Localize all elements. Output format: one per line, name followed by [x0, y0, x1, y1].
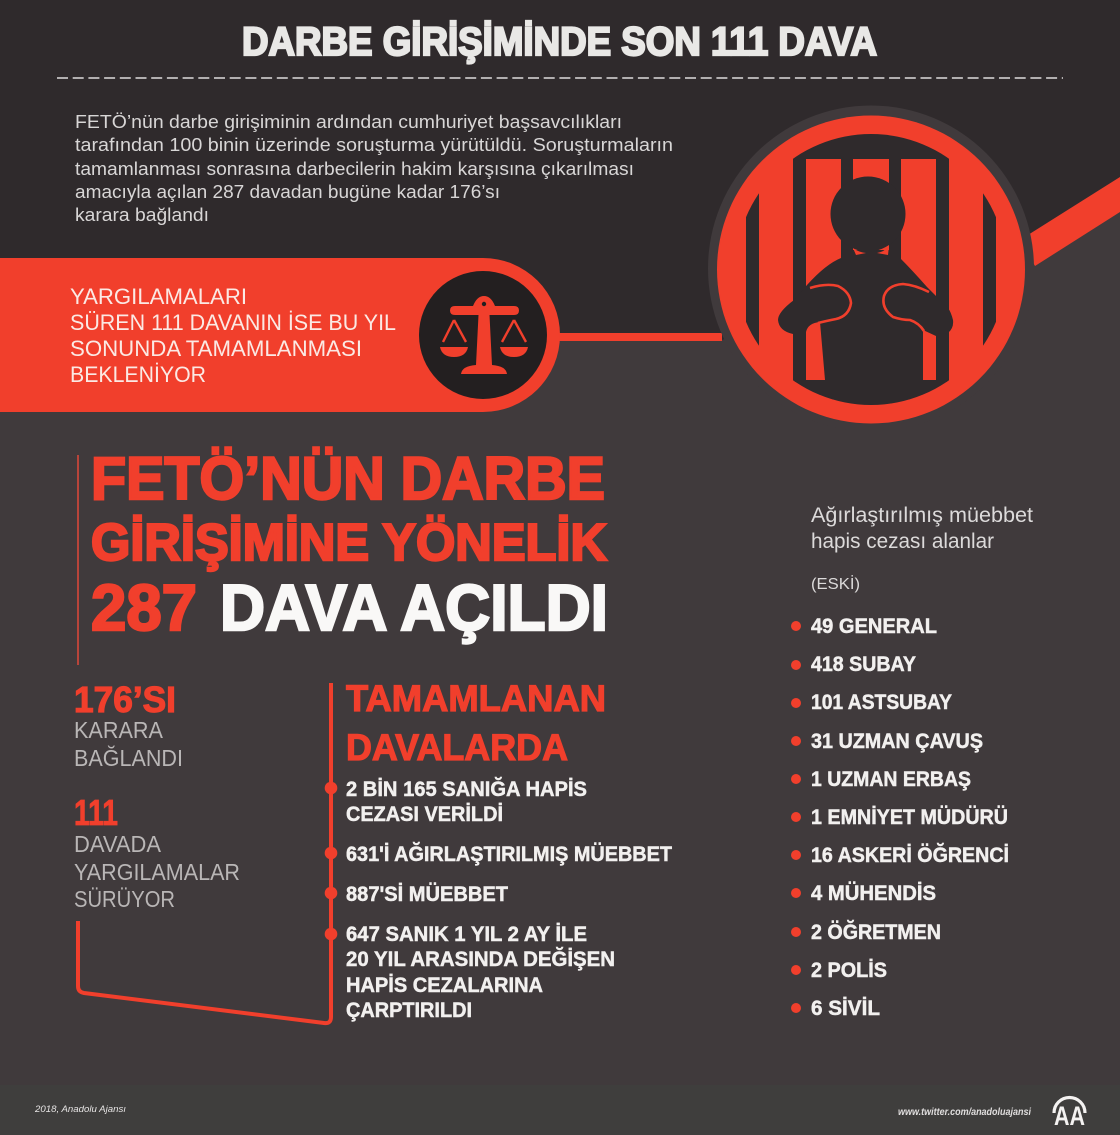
banner text: SÜREN 111 DAVANIN İSE BU YIL	[70, 310, 396, 335]
banner text: SONUNDA TAMAMLANMASI	[70, 336, 362, 361]
intro paragraph: tamamlanması sonrasına darbecilerin hakim karşısına çıkarılması	[75, 159, 634, 179]
right column heading: Ağırlaştırılmış müebbet	[811, 504, 1033, 527]
right column list: 2 POLİS	[811, 958, 887, 982]
completed cases list: ÇARPTIRILDI	[346, 998, 472, 1022]
top dark panel	[0, 0, 1120, 340]
stat: 111 ongoing	[74, 792, 240, 912]
completed cases list: HAPİS CEZALARINA	[346, 973, 543, 997]
completed cases list: CEZASI VERİLDİ	[346, 802, 503, 826]
right column list: 31 UZMAN ÇAVUŞ	[811, 729, 983, 753]
icon: Anadolu Agency logo: AA	[1054, 1101, 1085, 1131]
icon: prisoner behind bars	[708, 106, 1034, 424]
stat: 176 decided	[74, 679, 183, 771]
right column list: 4 MÜHENDİS	[811, 880, 936, 905]
right column heading	[811, 504, 1033, 593]
intro paragraph: amacıyla açılan 287 davadan bugüne kadar 176’sı	[75, 182, 500, 202]
stat: 111 ongoing: 111	[74, 792, 118, 833]
stat: 176 decided: KARARA	[74, 717, 164, 743]
completed cases heading: DAVALARDA	[346, 727, 568, 768]
completed cases list: 20 YIL ARASINDA DEĞİŞEN	[346, 946, 615, 971]
title: DARBE GİRİŞİMİNDE SON 111 DAVA	[242, 20, 877, 64]
stat: 176 decided: BAĞLANDI	[74, 745, 183, 771]
right column heading: (ESKİ)	[811, 574, 860, 593]
main heading: GİRİŞİMİNE YÖNELİK	[91, 514, 607, 572]
footer credit: 2018, Anadolu Ajansı	[34, 1104, 126, 1115]
connector line from banner to prison icon	[540, 333, 722, 341]
main heading: FETÖ’NÜN DARBE	[91, 445, 605, 512]
completed cases list: 2 BİN 165 SANIĞA HAPİS	[346, 776, 587, 801]
connector line with timeline	[78, 685, 337, 1023]
right column list: 2 ÖĞRETMEN	[811, 919, 941, 944]
right column list: 1 UZMAN ERBAŞ	[811, 767, 971, 791]
figure	[778, 250, 953, 382]
intro paragraph: tarafından 100 binin üzerinde soruşturma yürütüldü. Soruşturmaların	[75, 135, 673, 155]
main heading	[78, 445, 608, 665]
intro paragraph: karara bağlandı	[75, 205, 209, 225]
completed cases list: 887'Sİ MÜEBBET	[346, 881, 508, 906]
diagonal red band	[1020, 177, 1120, 266]
main heading: 287	[91, 571, 197, 644]
completed cases heading: TAMAMLANAN	[346, 678, 606, 719]
right column list: 16 ASKERİ ÖĞRENCİ	[811, 842, 1009, 867]
red banner	[0, 258, 560, 412]
right column list	[791, 614, 1009, 1020]
completed cases list: 647 SANIK 1 YIL 2 AY İLE	[346, 922, 587, 946]
banner text: BEKLENİYOR	[70, 362, 206, 387]
completed cases list: 631'İ AĞIRLAŞTIRILMIŞ MÜEBBET	[346, 841, 672, 866]
main heading: DAVA AÇILDI	[220, 571, 608, 644]
stat: 111 ongoing: SÜRÜYOR	[74, 886, 175, 912]
stat: 111 ongoing: YARGILAMALAR	[74, 859, 240, 885]
completed cases heading	[346, 678, 606, 768]
intro paragraph	[75, 112, 673, 225]
right column list: 6 SİVİL	[811, 996, 880, 1020]
right column list: 418 SUBAY	[811, 652, 916, 676]
right column list: 49 GENERAL	[811, 614, 937, 638]
intro paragraph: FETÖ’nün darbe girişiminin ardından cumhuriyet başsavcılıkları	[75, 112, 622, 132]
banner text	[70, 284, 396, 387]
footer twitter url: www.twitter.com/anadoluajansi	[898, 1107, 1031, 1118]
stat: 176 decided: 176’SI	[74, 679, 176, 720]
icon: scales of justice	[419, 271, 547, 399]
right column list: 101 ASTSUBAY	[811, 690, 952, 714]
right column heading: hapis cezası alanlar	[811, 530, 994, 553]
completed cases list	[346, 776, 672, 1022]
footer band	[0, 1085, 1120, 1135]
banner text: YARGILAMALARI	[70, 284, 247, 309]
stat: 111 ongoing: DAVADA	[74, 831, 162, 857]
right column list: 1 EMNİYET MÜDÜRÜ	[811, 804, 1008, 829]
